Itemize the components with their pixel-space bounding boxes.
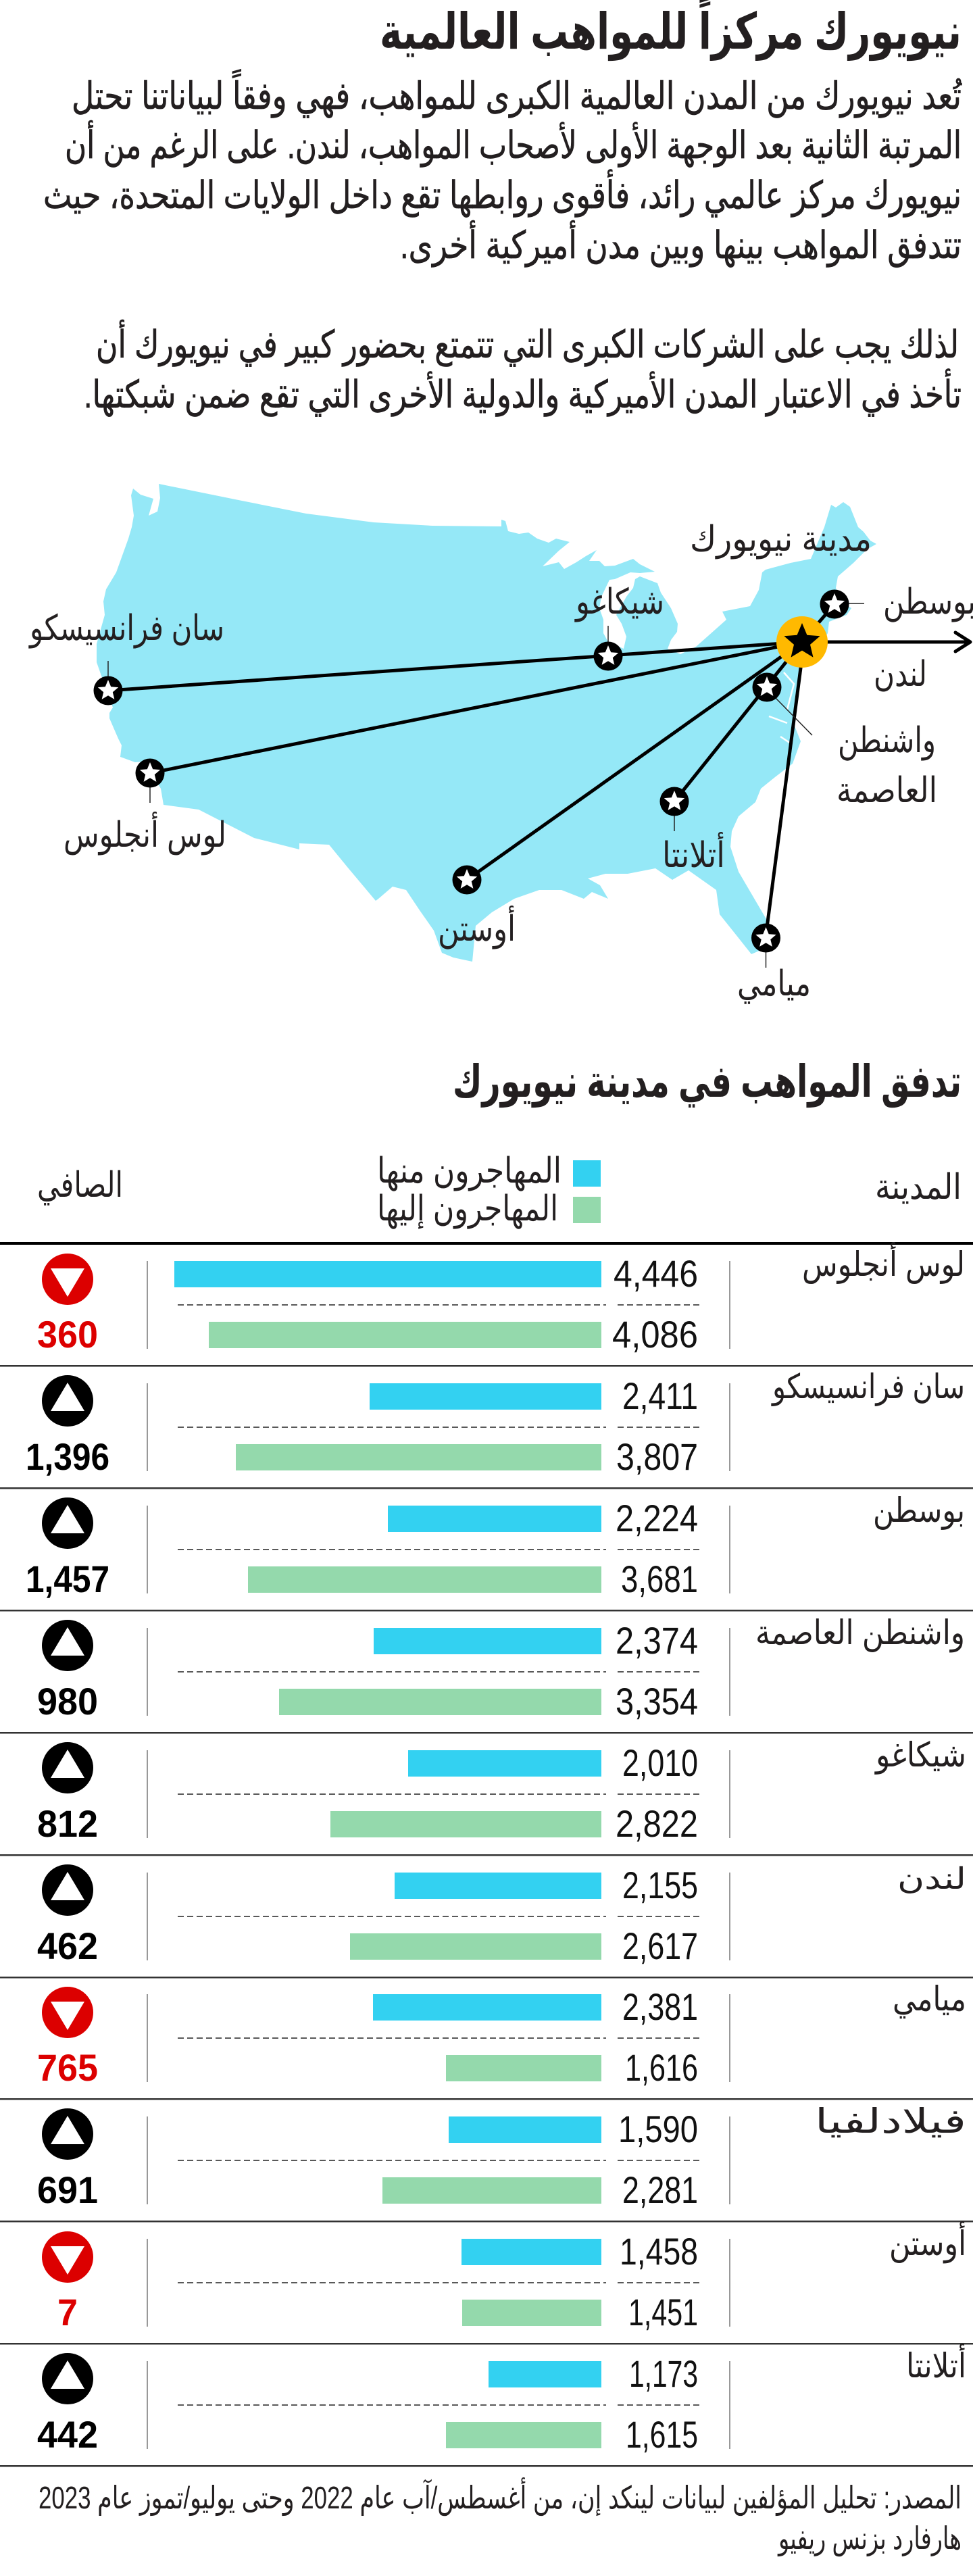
header rule <box>0 1242 973 1245</box>
row: Atlanta: 442 <box>37 2413 98 2456</box>
row: Philadelphia: 691 <box>37 2169 98 2211</box>
leader ticks <box>108 603 864 968</box>
row: Austin: 1,451 <box>628 2291 698 2333</box>
map labels: واشنطن <box>838 721 936 761</box>
row: Washington: 980 <box>37 1680 98 1723</box>
row: Chicago: 812 <box>37 1802 98 1845</box>
row: Washington: 3,354 <box>616 1680 698 1723</box>
map land shape <box>97 484 876 962</box>
row: Philadelphia: 1,590 <box>618 2108 698 2150</box>
bay inlets <box>579 538 794 743</box>
source note <box>39 2477 962 2557</box>
intro paragraph <box>43 69 962 268</box>
marker: Boston <box>820 589 849 619</box>
marker: Atlanta <box>659 787 689 816</box>
row: San Francisco: 3,807 <box>616 1435 698 1478</box>
row: Boston: 3,681 <box>621 1558 698 1600</box>
row: Chicago <box>0 1736 973 1856</box>
connection lines to New York <box>108 604 834 938</box>
marker: Los Angeles <box>135 758 165 788</box>
legend <box>377 1151 601 1229</box>
table header <box>37 1151 962 1229</box>
legend: المهاجرون إليها <box>377 1189 558 1229</box>
row: Austin <box>0 2221 973 2345</box>
row: Austin: 1,458 <box>620 2230 698 2273</box>
map labels: شيكاغو <box>574 583 664 622</box>
row: Boston: 1,457 <box>26 1558 109 1600</box>
column label: city: المدينة <box>875 1168 962 1207</box>
row: Atlanta <box>0 2344 973 2467</box>
map labels: أوستن <box>438 906 516 949</box>
row: London: 2,617 <box>622 1925 698 1967</box>
row: Los Angeles: 4,086 <box>612 1313 698 1356</box>
map labels: مدينة نيويورك <box>690 520 872 560</box>
map labels <box>28 520 973 1004</box>
row: Philadelphia: 2,281 <box>622 2169 698 2211</box>
row: Miami: 2,381 <box>622 1985 698 2028</box>
row: Atlanta: 1,173 <box>629 2352 698 2395</box>
row: San Francisco: 1,396 <box>26 1435 109 1478</box>
row: Boston: 2,224 <box>616 1497 698 1539</box>
row: Chicago: 2,822 <box>616 1802 698 1845</box>
row: San Francisco: 2,411 <box>622 1374 698 1417</box>
marker: Chicago <box>593 642 623 670</box>
map labels: ميامي <box>737 964 811 1004</box>
row: Atlanta: أتلانتا <box>906 2344 966 2385</box>
legend: المهاجرون منها <box>377 1151 562 1191</box>
row: London <box>0 1862 973 1979</box>
second paragraph <box>84 320 962 417</box>
arrow to London <box>828 633 970 651</box>
row: Washington: 2,374 <box>616 1619 698 1662</box>
row: Atlanta: 1,615 <box>626 2413 698 2456</box>
map labels: لوس أنجلوس <box>64 812 226 856</box>
row: London: لندن <box>897 1862 966 1896</box>
map of United States <box>28 484 973 1004</box>
marker: San Francisco <box>93 676 123 705</box>
row: Los Angeles: 360 <box>37 1313 98 1356</box>
row: Miami: 765 <box>37 2046 98 2089</box>
row: Philadelphia: فيلادلفيا <box>815 2102 966 2140</box>
row: Los Angeles <box>0 1242 973 1366</box>
marker: Miami <box>751 923 780 953</box>
row: London: 2,155 <box>622 1864 698 1906</box>
row: Washington <box>0 1614 973 1734</box>
row: Miami: 1,616 <box>625 2046 698 2089</box>
row: Chicago: 2,010 <box>622 1741 698 1784</box>
row: San Francisco <box>0 1368 973 1489</box>
map labels: أتلانتا <box>662 832 725 875</box>
row: Miami <box>0 1980 973 2100</box>
row: Philadelphia <box>0 2102 973 2222</box>
map labels: العاصمة <box>837 771 937 810</box>
marker: Austin <box>453 865 481 895</box>
column label: net: الصافي <box>37 1166 123 1206</box>
row: London: 462 <box>37 1925 98 1967</box>
marker: New York <box>776 616 828 668</box>
row: Los Angeles: 4,446 <box>614 1252 698 1295</box>
row: Austin: 7 <box>57 2291 78 2333</box>
map labels: لندن <box>874 655 927 694</box>
marker: Washington <box>753 673 781 701</box>
row: Boston <box>0 1491 973 1611</box>
map labels: سان فرانسيسكو <box>28 609 224 649</box>
